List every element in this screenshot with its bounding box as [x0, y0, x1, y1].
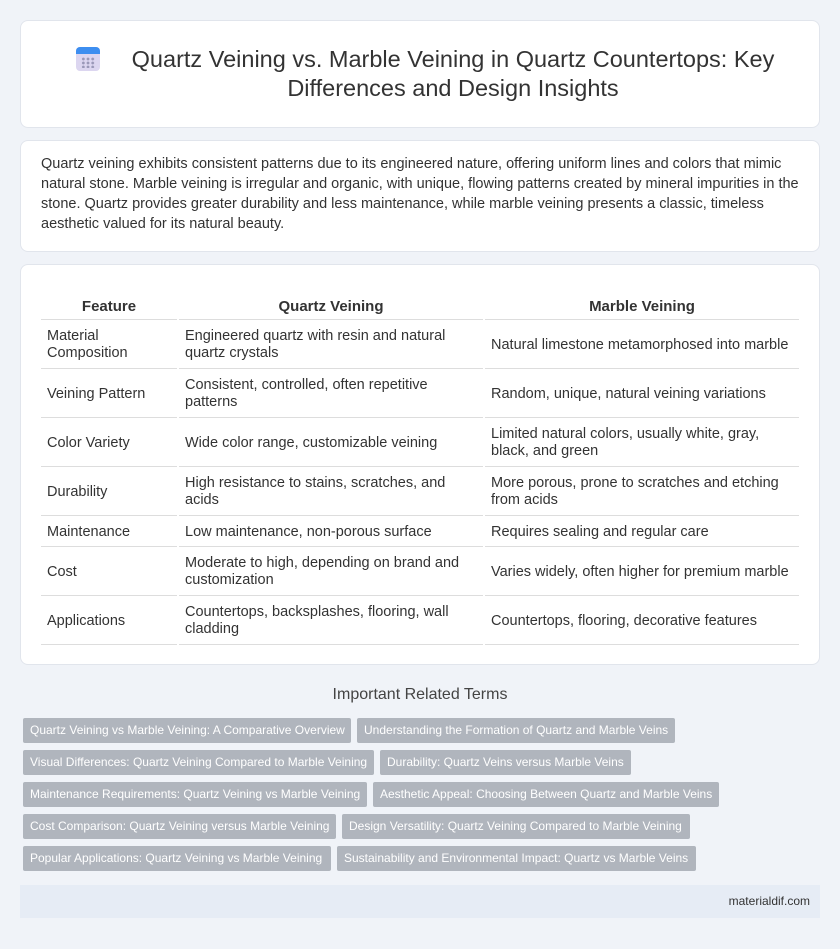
related tags: Understanding the Formation of Quartz and Marble Veins: [364, 723, 668, 737]
related tags: Design Versatility: Quartz Veining Compared to Marble Veining: [349, 819, 682, 833]
intro text: [20, 140, 820, 252]
footer: materialdif.com: [729, 894, 810, 908]
comparison table: Consistent, controlled, often repetitive patterns: [185, 377, 428, 410]
comparison table: Engineered quartz with resin and natural quartz crystals: [185, 328, 445, 361]
comparison table: Cost: [47, 564, 77, 580]
comparison table: Material Composition: [47, 328, 128, 361]
comparison table: Requires sealing and regular care: [491, 524, 709, 540]
comparison table: Wide color range, customizable veining: [185, 434, 437, 450]
comparison table: Marble Veining: [589, 298, 695, 315]
related tags: Quartz Veining vs Marble Veining: A Comparative Overview: [30, 723, 345, 737]
comparison table: Moderate to high, depending on brand and customization: [185, 555, 459, 588]
related terms heading: Important Related Terms: [333, 686, 507, 703]
related tags: Popular Applications: Quartz Veining vs Marble Veining: [30, 851, 322, 865]
comparison table: Durability: [47, 484, 107, 500]
comparison table: Natural limestone metamorphosed into marble: [491, 336, 788, 352]
comparison table: More porous, prone to scratches and etching from acids: [491, 475, 779, 508]
comparison table: Countertops, backsplashes, flooring, wall cladding: [185, 604, 449, 637]
footer: [20, 885, 820, 918]
comparison table: Varies widely, often higher for premium marble: [491, 564, 789, 580]
comparison table: Quartz Veining: [278, 298, 384, 315]
comparison table: Color Variety: [47, 434, 130, 450]
comparison table: Feature: [82, 298, 136, 315]
comparison table: [20, 264, 820, 665]
comparison table: Applications: [47, 612, 125, 628]
icon: calendar: [76, 47, 100, 71]
related tags: Cost Comparison: Quartz Veining versus Marble Veining: [30, 819, 329, 833]
related tags: Maintenance Requirements: Quartz Veining vs Marble Veining: [30, 787, 360, 801]
related tags: Durability: Quartz Veins versus Marble Veins: [387, 755, 624, 769]
header card: [20, 20, 820, 128]
title: Quartz Veining vs. Marble Veining in Quartz Countertops: Key Differences and Design Insights: [132, 46, 774, 101]
comparison table: Limited natural colors, usually white, gray, black, and green: [491, 426, 759, 459]
comparison table: Low maintenance, non-porous surface: [185, 524, 432, 540]
comparison table: Veining Pattern: [47, 386, 145, 402]
related tags: Visual Differences: Quartz Veining Compared to Marble Veining: [30, 755, 367, 769]
comparison table: Maintenance: [47, 524, 130, 540]
related tags: Aesthetic Appeal: Choosing Between Quartz and Marble Veins: [380, 787, 712, 801]
comparison table: Countertops, flooring, decorative features: [491, 612, 757, 628]
comparison table: Random, unique, natural veining variations: [491, 386, 766, 402]
intro text: Quartz veining exhibits consistent patterns due to its engineered nature, offering uniform lines and colors that mimic natural stone. Marble veining is irregular and organic, with unique, flowing patterns created by mineral impurities in the stone. Quartz provides greater durability and less maintenance, while marble veining presents a classic, timeless aesthetic valued for its natural beauty.: [41, 156, 799, 232]
comparison table: High resistance to stains, scratches, and acids: [185, 475, 445, 508]
related tags: Sustainability and Environmental Impact: Quartz vs Marble Veins: [344, 851, 688, 865]
